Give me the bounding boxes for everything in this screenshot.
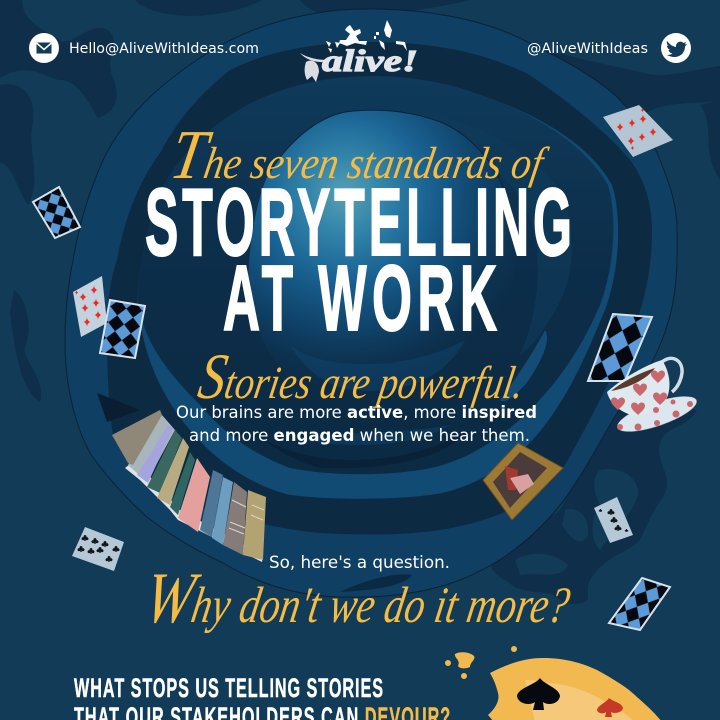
section heading bbox=[74, 673, 450, 720]
title STORYTELLING: STORYTELLING bbox=[145, 170, 572, 276]
red spade bbox=[597, 698, 623, 717]
picture frame bbox=[483, 443, 563, 520]
tart bbox=[445, 646, 662, 720]
outer band bbox=[65, 9, 677, 597]
tunnel bbox=[65, 9, 677, 597]
card: checker back 2 bbox=[100, 300, 145, 358]
intro text bbox=[176, 403, 537, 446]
title AT WORK: AT WORK bbox=[223, 246, 497, 350]
title script line: The seven standards of bbox=[165, 116, 556, 193]
subheading: stories are powerful: Stories are powerful. bbox=[193, 340, 531, 412]
logo bbox=[300, 20, 418, 82]
logo: alive! bbox=[322, 43, 418, 78]
card: checker back 3 bbox=[588, 314, 652, 381]
question lead-in: So, here's a question. bbox=[269, 553, 450, 573]
card: checker back 1 bbox=[33, 187, 80, 238]
central glow bbox=[248, 110, 514, 406]
twitter icon bbox=[661, 33, 691, 63]
card: clubs bbox=[72, 527, 124, 571]
card: spades bbox=[594, 497, 633, 543]
teacup bbox=[607, 358, 701, 439]
crumbs bbox=[445, 646, 517, 679]
blotch highlights bbox=[515, 469, 638, 575]
spade bbox=[517, 678, 560, 710]
twitter handle: @AliveWithIdeas bbox=[527, 41, 648, 57]
question script: Why don't we do it more? bbox=[139, 559, 578, 638]
card: checker back 4 bbox=[609, 578, 670, 630]
card: seven of diamonds right bbox=[603, 105, 673, 157]
ring interior bbox=[137, 76, 613, 474]
intro text: Our brains are more active, more inspired bbox=[176, 403, 537, 423]
lip shadow bbox=[340, 574, 412, 592]
dark band bbox=[107, 42, 652, 535]
email address: Hello@AliveWithIdeas.com bbox=[69, 41, 259, 57]
card: seven of diamonds left bbox=[73, 276, 107, 337]
intro text: and more engaged when we hear them. bbox=[189, 426, 530, 446]
section heading: WHAT STOPS US TELLING STORIES bbox=[74, 673, 383, 703]
email icon bbox=[29, 33, 59, 63]
ring top layer bbox=[137, 76, 618, 499]
books bbox=[97, 393, 266, 562]
